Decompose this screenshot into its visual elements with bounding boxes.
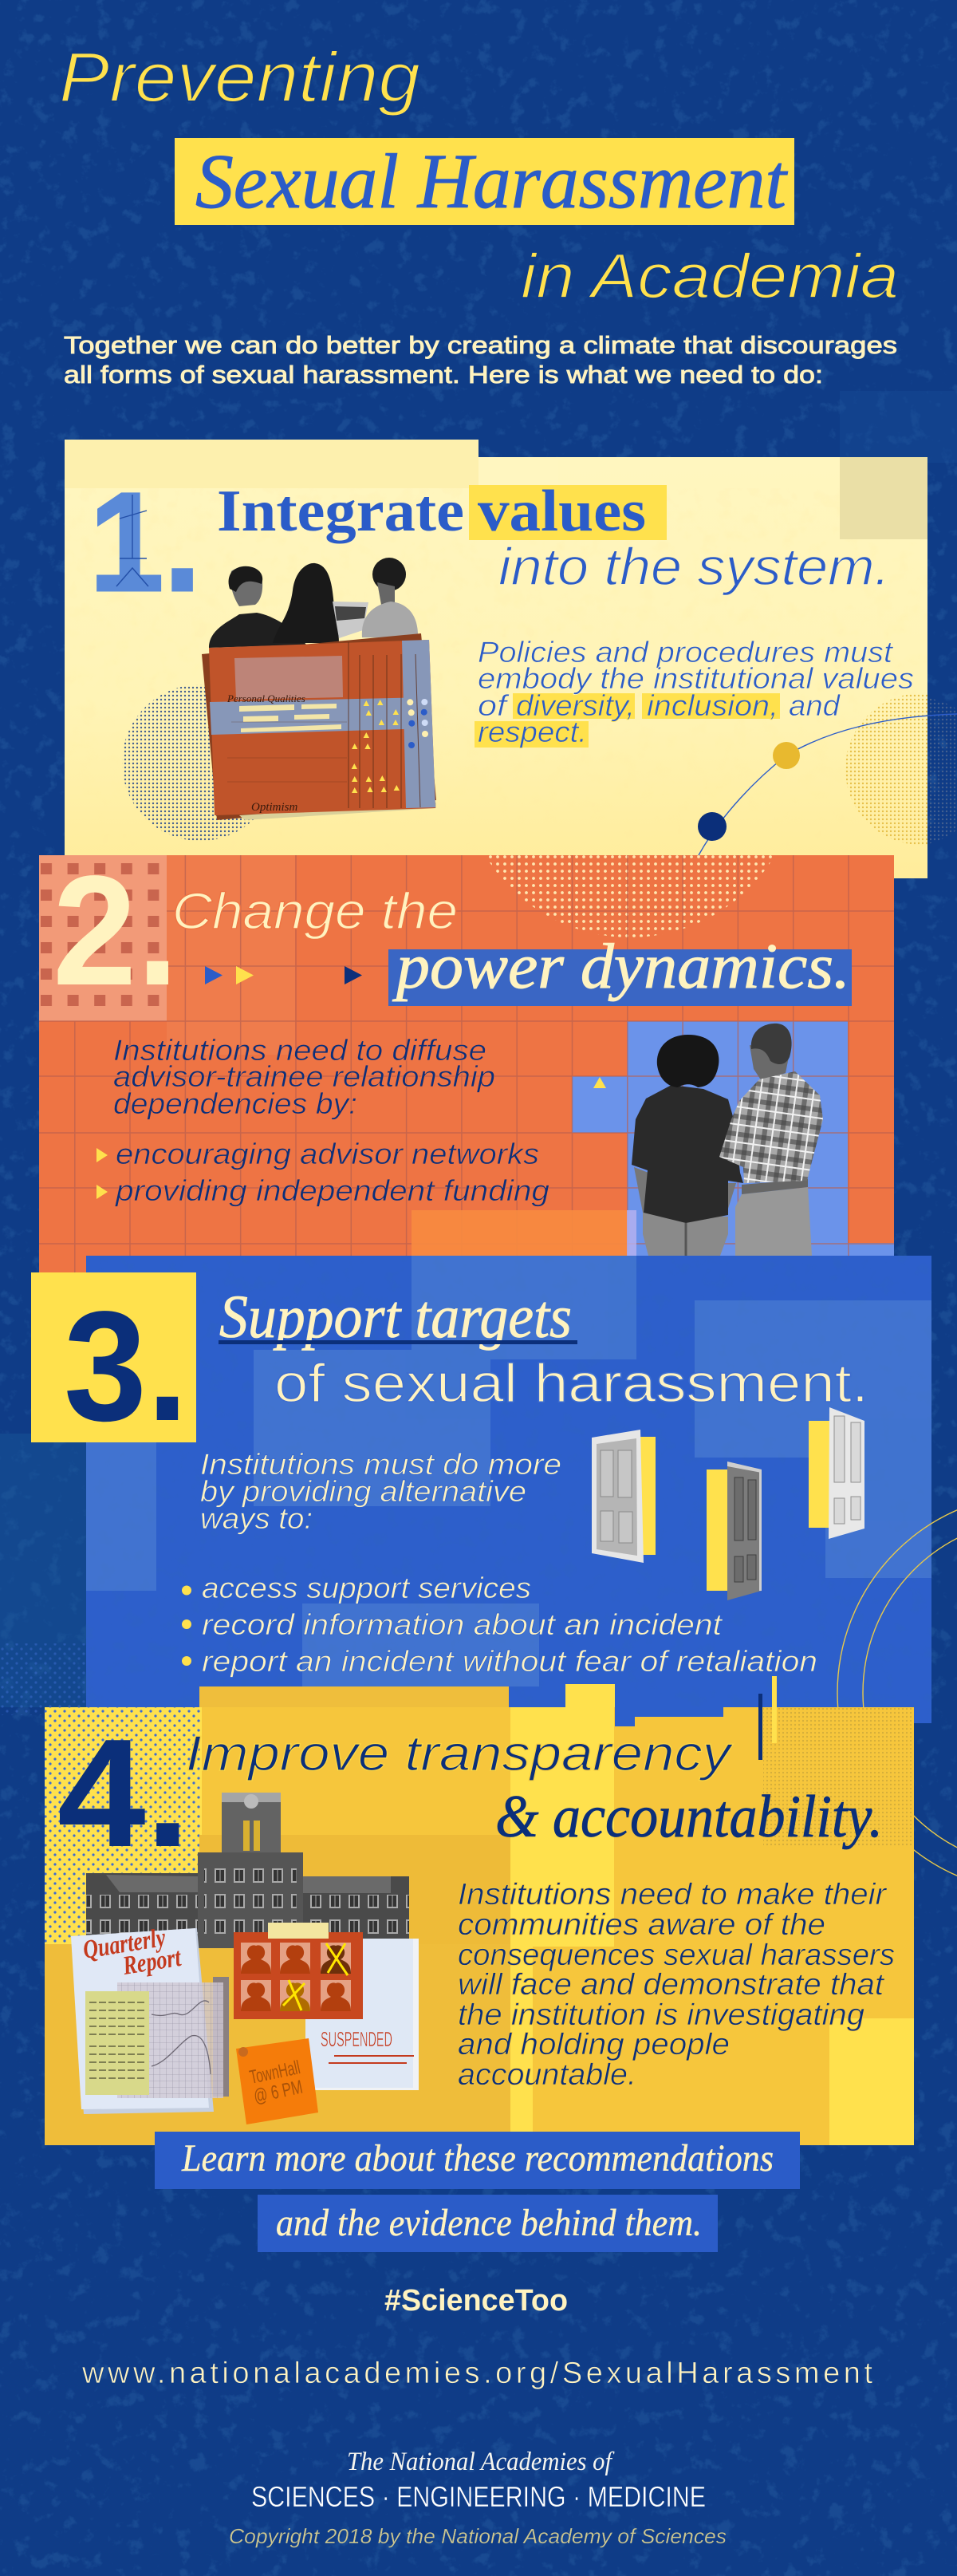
bullet list: encouraging advisor networks bbox=[116, 1138, 539, 1170]
intro text: all forms of sexual harassment. Here is what we need to do: bbox=[64, 361, 823, 389]
heading: power dynamics: power dynamics. bbox=[392, 932, 850, 1002]
yellow triangle bbox=[593, 1077, 606, 1088]
body text: accountable. bbox=[458, 2058, 636, 2092]
numeral 2: 2. bbox=[53, 843, 179, 1018]
record card bbox=[202, 633, 436, 820]
footer: organisation and copyright: The National Academies of bbox=[347, 2448, 615, 2476]
body text: policies: and bbox=[789, 689, 841, 722]
body text: ways to: bbox=[200, 1502, 313, 1535]
dotted circle right bbox=[845, 693, 957, 845]
body text: consequences sexual harassers bbox=[458, 1939, 895, 1972]
heading: of sexual harassment: of sexual harassment. bbox=[274, 1353, 868, 1414]
dotted circle left bbox=[122, 684, 278, 841]
call to action: learn more bbox=[155, 2132, 800, 2252]
body text: will face and demonstrate that bbox=[458, 1968, 885, 2002]
banner line 2: and the evidence behind them. bbox=[276, 2202, 702, 2244]
panel 4: improve transparency bbox=[45, 1676, 914, 2145]
heading: Integrate values into the system: into the system. bbox=[498, 537, 890, 596]
body text bbox=[200, 1448, 561, 1535]
bullet list bbox=[96, 1138, 549, 1207]
body text: Institutions need to diffuse bbox=[113, 1034, 486, 1067]
pattern block bbox=[39, 855, 167, 1021]
illustration: quarterly report bbox=[71, 1923, 229, 2114]
decorative arcs bbox=[837, 1493, 957, 1892]
bullet list: record information about an incident bbox=[202, 1608, 723, 1641]
body text: dependencies by: bbox=[113, 1087, 357, 1120]
icon: door 2 bbox=[707, 1462, 762, 1600]
body text: advisor-trainee relationship bbox=[113, 1060, 495, 1093]
body text bbox=[113, 1034, 495, 1120]
bullet list bbox=[182, 1572, 817, 1678]
man bbox=[719, 1024, 823, 1256]
panel 3: support targets bbox=[31, 1256, 931, 1723]
illustration: quarterly report: Quarterly bbox=[81, 1923, 167, 1965]
orange overlay bbox=[412, 1210, 627, 1256]
skyline blocks bbox=[199, 1684, 615, 1710]
intro text: Together we can do better by creating a climate that discourages bbox=[64, 331, 897, 359]
body text: the institution is investigating bbox=[458, 1998, 864, 2032]
illustration: campus building bbox=[86, 1793, 409, 1948]
title line: Preventing: Preventing bbox=[59, 37, 420, 116]
bullet list: providing independent funding bbox=[115, 1174, 549, 1207]
body text bbox=[458, 1878, 895, 2092]
body text: by providing alternative bbox=[200, 1475, 526, 1508]
colour blocks bbox=[45, 1707, 914, 2145]
footer: organisation and copyright: SCIENCES · ENGINEERING · MEDICINE bbox=[251, 2480, 706, 2513]
illustration: suspended notice bbox=[305, 1939, 419, 2090]
illustration: photo board bbox=[234, 1923, 363, 2019]
body text: Institutions must do more bbox=[200, 1448, 561, 1481]
intro text bbox=[64, 331, 897, 389]
laptop bbox=[333, 602, 368, 638]
heading: accountability: & accountability. bbox=[495, 1784, 883, 1850]
body text: policies: inclusion, bbox=[647, 689, 778, 722]
person: woman with braids bbox=[273, 563, 339, 643]
numeral 3 box: 3. bbox=[64, 1279, 188, 1454]
banner line 1 bbox=[155, 2132, 800, 2189]
body text: communities aware of the bbox=[458, 1908, 825, 1942]
blue block bbox=[572, 1021, 894, 1256]
bullet list: report an incident without fear of retaliation bbox=[202, 1645, 817, 1678]
heading: Change the: Change the bbox=[172, 882, 458, 940]
vertical bars bbox=[758, 1676, 777, 1760]
arrows bbox=[205, 966, 362, 984]
title highlight: Sexual Harassment: Sexual Harassment bbox=[195, 139, 788, 224]
icon: door 1 bbox=[592, 1430, 656, 1563]
illustration: people behind a record card bbox=[202, 558, 436, 820]
record card: Personal Qualities bbox=[226, 692, 305, 704]
body text: policies: of bbox=[478, 689, 510, 722]
body text: policies: Policies and procedures must bbox=[478, 636, 894, 669]
panel 1: integrate values bbox=[65, 440, 957, 878]
footer: organisation and copyright: Copyright 2018 by the National Academy of Sciences bbox=[229, 2524, 727, 2548]
heading: Improve transparency: Improve transparency bbox=[186, 1726, 734, 1781]
person: man bbox=[209, 566, 306, 648]
illustration: sticky note bbox=[236, 2038, 318, 2124]
notch cut from panel top bbox=[615, 1706, 723, 1726]
person: woman in grey bbox=[362, 558, 418, 638]
illustration: sticky note: @ 6 PM bbox=[252, 2077, 305, 2108]
woman bbox=[632, 1035, 743, 1256]
illustration: sticky note: TownHall bbox=[248, 2057, 302, 2089]
heading: Integrate values into the system: Integrate bbox=[217, 479, 464, 544]
banner line 1: Learn more about these recommendations bbox=[181, 2137, 774, 2180]
heading: Support targets: Support targets bbox=[219, 1284, 572, 1351]
body text: policies bbox=[475, 636, 914, 748]
panel 2: change the power dynamics bbox=[39, 855, 894, 1272]
banner line 2 bbox=[258, 2195, 718, 2252]
body text: policies: embody the institutional values bbox=[478, 662, 914, 695]
bullet list: access support services bbox=[202, 1572, 531, 1604]
orbit arc with dots bbox=[698, 714, 957, 855]
people: couple seen from behind bbox=[632, 1024, 823, 1256]
illustration: quarterly report: Report bbox=[120, 1943, 183, 1981]
body text: policies: respect. bbox=[478, 716, 587, 748]
hashtag: #ScienceToo bbox=[384, 2284, 568, 2318]
heading: Integrate values into the system: values bbox=[478, 479, 646, 544]
body text: and holding people bbox=[458, 2028, 730, 2061]
numeral 4: 4. bbox=[57, 1706, 190, 1879]
title bbox=[59, 37, 899, 311]
website url: www.nationalacademies.org/SexualHarassment bbox=[81, 2357, 872, 2390]
heading: Integrate values into the system bbox=[217, 479, 890, 596]
dotted semicircle bbox=[489, 855, 772, 937]
numeral 1: 1. bbox=[89, 464, 201, 621]
icon: door 3 bbox=[809, 1407, 864, 1539]
body text: policies: diversity, bbox=[516, 689, 635, 722]
title line: in Academia: in Academia bbox=[521, 240, 899, 311]
record card: Optimism bbox=[251, 801, 298, 814]
illustration: suspended notice: SUSPENDED bbox=[321, 2027, 392, 2051]
body text: Institutions need to make their bbox=[458, 1878, 887, 1911]
footer: organisation and copyright bbox=[229, 2448, 727, 2548]
